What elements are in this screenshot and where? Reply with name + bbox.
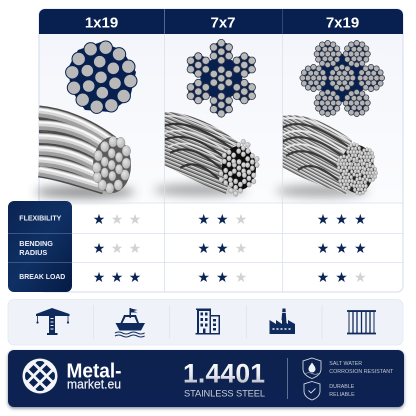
text: salt water corrosion resistant: SALT WATER (329, 361, 362, 367)
cable end face (336, 142, 378, 196)
stars: 7x19 break load (318, 272, 366, 282)
stars: 1x19 break load (94, 272, 140, 282)
icon: water shield (303, 358, 321, 378)
label: bending radius: BENDING (19, 239, 53, 248)
heading: 7x7 (164, 9, 282, 34)
heading: 7x19: 7x19 (326, 14, 359, 32)
heading: 7x7: 7x7 (210, 14, 236, 32)
comparison table (35, 9, 403, 292)
icon: Metal-market logo (22, 358, 58, 394)
cross-section: 7x7 rope (187, 39, 256, 117)
panel: rating labels (8, 201, 72, 292)
text: durable reliable: RELIABLE (329, 392, 355, 398)
stars: 7x19 bending radius (318, 243, 366, 253)
panel: 7x19 column (276, 9, 403, 203)
cross-section: 1x19 strand (66, 41, 137, 113)
panel: applications (8, 300, 403, 345)
cable photo: 7x7 (154, 105, 259, 200)
text: durable reliable: DURABLE (329, 384, 354, 390)
material number: 1.4401 (183, 358, 265, 388)
panel: 1x19 column (35, 9, 164, 198)
panel: brand and material (8, 350, 404, 407)
heading: 7x19 (282, 9, 403, 34)
icon: check shield (304, 382, 320, 400)
icon: factory (270, 308, 295, 334)
cable photo: 7x19 (276, 105, 378, 203)
heading: 1x19: 1x19 (85, 14, 118, 32)
icon: ship (115, 308, 145, 337)
label: bending radius: RADIUS (19, 248, 47, 257)
panel: 7x7 column (154, 9, 282, 200)
label: break load: BREAK LOAD (19, 272, 65, 281)
stars: 7x7 break load (198, 272, 246, 282)
stars: 1x19 bending radius (94, 243, 140, 253)
brand name: Metal- (66, 360, 122, 382)
stars: 7x7 bending radius (198, 243, 246, 253)
cable end face (92, 136, 131, 194)
brand domain: market.eu (67, 378, 121, 392)
cable end face (219, 139, 259, 196)
label: flexibility: FLEXIBILITY (19, 214, 61, 222)
stars: 7x7 flexibility (198, 214, 246, 224)
star ratings (94, 214, 366, 282)
icon: cargo container (347, 311, 376, 334)
text: salt water corrosion resistant: CORROSION RESISTANT (329, 369, 394, 375)
material label: STAINLESS STEEL (184, 388, 265, 398)
cable photo: 1x19 (35, 110, 135, 198)
icon: crane (36, 308, 70, 335)
table body (39, 9, 403, 292)
icon: buildings (196, 308, 220, 334)
stars: 1x19 flexibility (94, 214, 140, 224)
table grid lines (72, 34, 403, 292)
stars: 7x19 flexibility (318, 214, 366, 224)
heading: 1x19 (39, 9, 164, 34)
cross-section: 7x19 rope (300, 40, 385, 117)
